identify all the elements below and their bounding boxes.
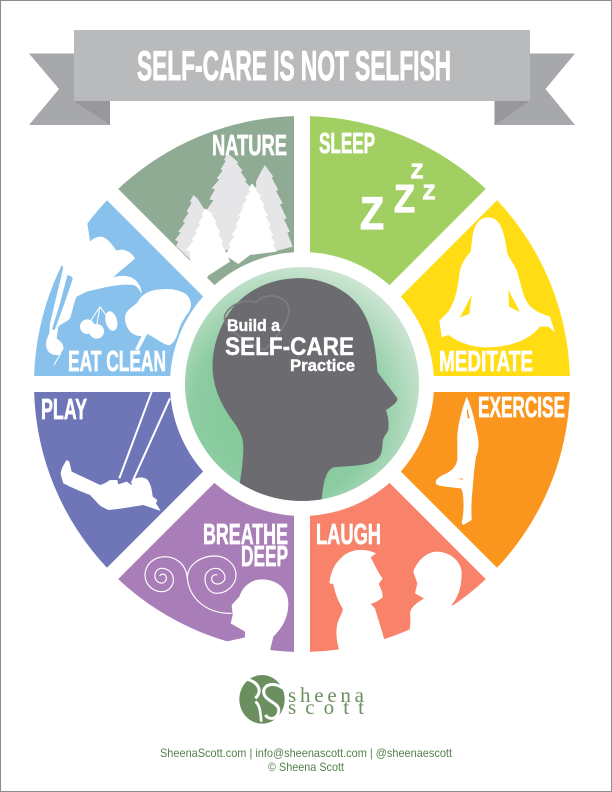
- logo mark: [239, 675, 285, 724]
- logo wordmark: sheena: [288, 683, 365, 707]
- icon: laughing people: [329, 550, 462, 654]
- footer contact line: SheenaScott.com | info@sheenascott.com | @sheenaescott: [160, 746, 453, 760]
- eat clean label: EAT CLEAN: [68, 346, 166, 378]
- breathe label line two: DEEP: [241, 541, 288, 573]
- panel: play: [34, 392, 203, 568]
- banner left fold: [74, 101, 110, 125]
- icon: child on a swing: [61, 392, 170, 511]
- icon: pine trees: [175, 153, 293, 278]
- banner right fold: [494, 101, 530, 125]
- meditate label: MEDITATE: [439, 346, 533, 378]
- meditate segment: [401, 200, 570, 376]
- nature label: NATURE: [212, 130, 287, 162]
- breathe deep segment: [118, 483, 294, 652]
- banner left tail: [29, 54, 110, 125]
- banner right tail: [494, 54, 575, 125]
- green halo circle: [185, 267, 419, 501]
- icon: meditating figure: [439, 217, 555, 347]
- head silhouette: [213, 278, 397, 520]
- heart outline: [225, 296, 289, 350]
- panel: laugh: [310, 483, 486, 654]
- sleep segment: [310, 116, 486, 285]
- laugh label: LAUGH: [316, 519, 381, 551]
- panel: sleep: [310, 116, 486, 285]
- center text: [225, 316, 355, 375]
- center text: Build a: [227, 316, 281, 335]
- play segment: [34, 392, 203, 568]
- breathe label line one: BREATHE: [203, 519, 288, 551]
- footer copyright: © Sheena Scott: [268, 760, 345, 774]
- logo wordmark: scott: [288, 695, 364, 719]
- sleep label: SLEEP: [319, 128, 375, 160]
- panel: eat clean: [34, 200, 203, 378]
- icon: fruits and vegetables: [43, 223, 191, 365]
- icon: sleeping Z letters: Z: [423, 182, 435, 204]
- panel: exercise: [401, 392, 570, 568]
- laugh segment: [310, 483, 486, 652]
- icon: sleeping Z letters: Z: [411, 161, 423, 183]
- icon: sleeping Z letters: Z: [360, 188, 384, 239]
- exercise segment: [401, 392, 570, 568]
- icon: sleeping Z letters: Z: [394, 178, 415, 221]
- logo wordmark: [288, 683, 365, 719]
- panel: meditate: [401, 200, 570, 378]
- logo: Sheena Scott: [239, 675, 365, 724]
- panel: nature: [118, 116, 294, 285]
- center text: Practice: [290, 356, 355, 375]
- icon: sleeping Z letters: [360, 161, 435, 239]
- icon: tree pose figure: [436, 397, 479, 525]
- play label: PLAY: [41, 394, 87, 426]
- eat clean segment: [34, 200, 203, 376]
- banner main band: [74, 30, 530, 101]
- title banner: [29, 30, 575, 125]
- panel: breathe deep: [118, 483, 294, 660]
- center text: SELF-CARE: [225, 333, 354, 361]
- nature segment: [118, 116, 294, 285]
- icon: breathing head with swirls: [145, 556, 288, 660]
- center badge: head: [185, 267, 419, 520]
